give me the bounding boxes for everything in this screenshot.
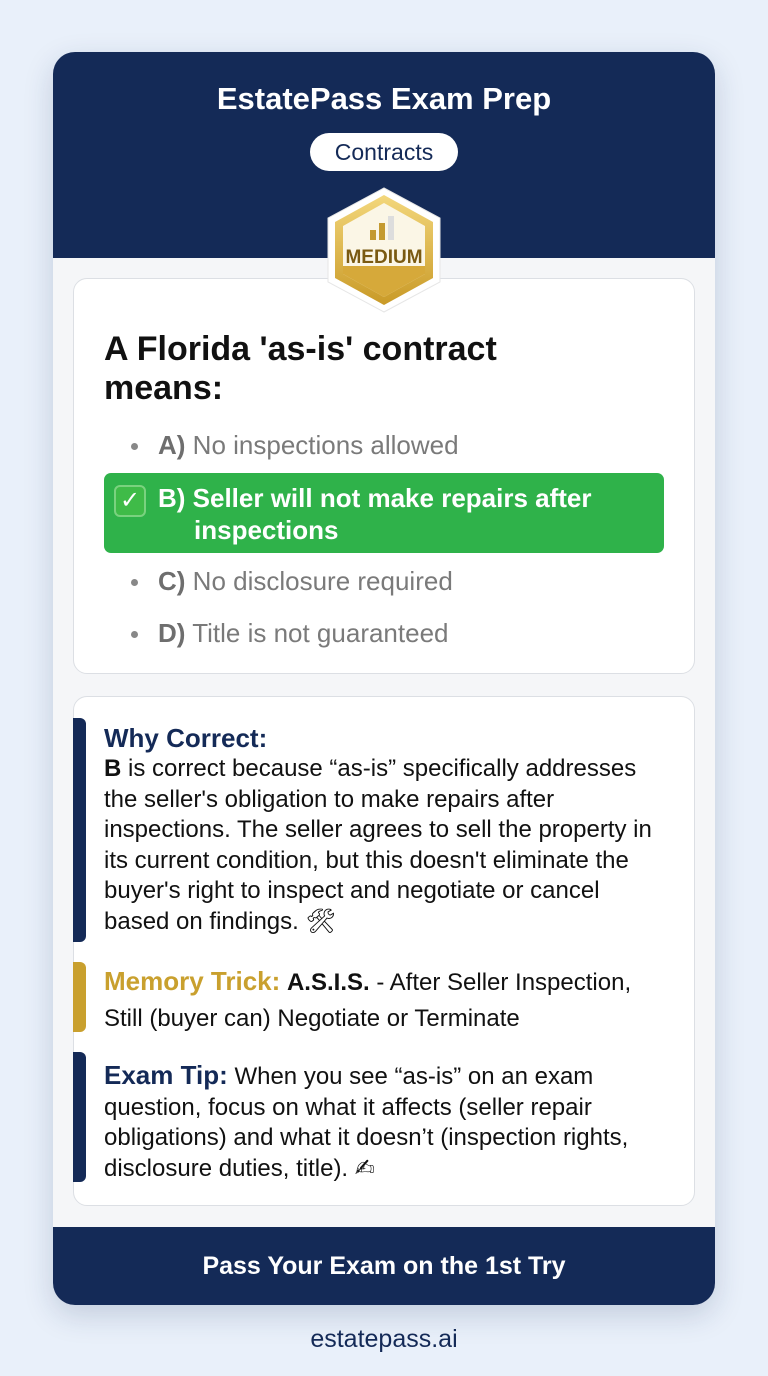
explanation card <box>73 696 695 1206</box>
question text: A Florida 'as-is' contract means: <box>104 330 497 407</box>
option D: D) Title is not guaranteed <box>158 618 448 648</box>
option B correct: B) Seller will not make repairs after <box>158 483 592 513</box>
footer band <box>53 1227 715 1305</box>
footer band: Pass Your Exam on the 1st Try <box>202 1252 566 1280</box>
icon: medium badge <box>328 187 440 312</box>
accent bars <box>73 718 86 942</box>
memory trick: Memory Trick: A.S.I.S. - After Seller Inspection, Still (buyer can) Negotiate or Terminate <box>104 966 631 1032</box>
icon: check: ✓ <box>120 487 140 514</box>
site url: estatepass.ai <box>310 1325 458 1353</box>
option A: A) No inspections allowed <box>158 430 459 460</box>
why correct: Why Correct: <box>104 723 267 753</box>
category pill <box>310 133 458 171</box>
header band <box>53 52 715 258</box>
why correct: B is correct because “as-is” specifically addresses the seller's obligation to make repairs after inspections. The seller agrees to sell the property in its current condition, but this doesn't eliminate the buyer's right to inspect and negotiate or cancel based on findings. 🛠 <box>104 755 652 934</box>
option B correct: inspections <box>194 515 338 545</box>
icon: check <box>114 485 146 517</box>
question card <box>73 278 695 674</box>
title: EstatePass Exam Prep <box>217 81 551 116</box>
option B correct <box>104 473 664 553</box>
main card <box>53 52 715 1305</box>
category pill: Contracts <box>335 139 433 165</box>
option C: C) No disclosure required <box>158 566 453 596</box>
exam tip: Exam Tip: When you see “as-is” on an exam question, focus on what it affects (seller repair obligations) and what it doesn’t (inspection rights, disclosure duties, title). ✍ <box>104 1060 628 1182</box>
icon: medium badge: MEDIUM <box>345 247 423 268</box>
